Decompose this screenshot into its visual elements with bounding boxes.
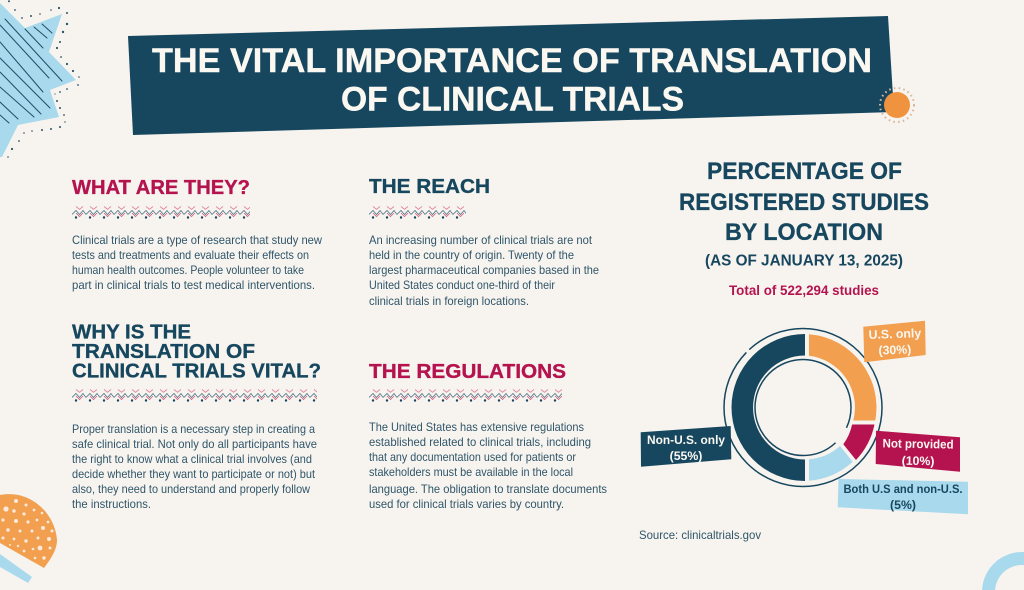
text block: why is translation vital: also, they need to understand and properly follow	[72, 483, 311, 496]
label: not provided: Not provided	[882, 436, 954, 452]
outer ring	[724, 328, 882, 486]
text block: what are they: human health outcomes. People volunteer to take	[72, 264, 304, 277]
text block: the regulations: established related to clinical trials, including	[369, 436, 591, 449]
total studies: Total of 522,294 studies	[729, 283, 879, 298]
title banner: THE VITAL IMPORTANCE OF TRANSLATION	[152, 42, 872, 80]
inner ring	[755, 360, 851, 456]
text block: the reach	[369, 234, 599, 308]
heading: percentage of registered studies	[679, 158, 929, 270]
text block: why is translation vital: decide whether they want to participate or not) but	[72, 468, 316, 481]
icon: orange circle on banner corner	[880, 88, 914, 122]
text block: the regulations: that any documentation used for patients or	[369, 451, 576, 464]
segment: both 5%	[809, 446, 853, 481]
panel: why is translation vital	[72, 320, 321, 511]
text block: the regulations: language. The obligation to translate documents	[369, 483, 607, 496]
heading: percentage of registered studies: REGISTERED STUDIES	[679, 189, 929, 216]
donut chart	[724, 328, 882, 486]
label: non-U.S. only	[641, 426, 731, 467]
text block: the reach: United States conduct one-third of their	[369, 279, 555, 292]
text block: why is translation vital: Proper translation is a necessary step in creating a	[72, 423, 316, 436]
text block: why is translation vital: the right to know what a clinical trial involves (and	[72, 453, 312, 466]
panel: the regulations	[369, 360, 607, 511]
label: U.S. only	[863, 321, 926, 362]
segment: non-U.S. only 55%	[732, 334, 805, 481]
heading: the regulations: THE REGULATIONS	[369, 360, 566, 383]
text block: why is translation vital	[72, 423, 317, 511]
text block: the regulations: The United States has extensive regulations	[369, 421, 584, 434]
icon: orange half circle with blue stick	[0, 494, 57, 583]
heading: why is translation vital	[72, 320, 321, 382]
label: both U.S and non-U.S.: (5%)	[890, 498, 916, 512]
heading: what are they: WHAT ARE THEY?	[72, 176, 250, 199]
segment: not provided 10%	[843, 424, 874, 460]
panel: the reach	[369, 175, 599, 308]
icon: blue star decoration	[0, 0, 80, 158]
label: both U.S and non-U.S.: Both U.S and non-U.S.	[844, 482, 962, 496]
text block: the reach: clinical trials in foreign locations.	[369, 295, 529, 308]
text block: why is translation vital: the instructions.	[72, 498, 151, 511]
text block: what are they	[72, 234, 323, 292]
text block: the reach: largest pharmaceutical companies based in the	[369, 264, 599, 277]
label: both U.S and non-U.S.	[838, 479, 968, 514]
text block: what are they: Clinical trials are a type of research that study new	[72, 234, 323, 247]
title banner	[128, 16, 894, 135]
panel: what are they	[72, 176, 323, 292]
text block: the regulations	[369, 421, 607, 511]
text block: what are they: tests and treatments and evaluate their effects on	[72, 249, 309, 262]
heading: percentage of registered studies: BY LOCATION	[725, 219, 883, 246]
heading: why is translation vital: CLINICAL TRIALS VITAL?	[72, 360, 321, 382]
text block: the reach: held in the country of origin. Twenty of the	[369, 249, 574, 262]
text block: the regulations: used for clinical trials varies by country.	[369, 498, 564, 511]
label: not provided: (10%)	[902, 454, 935, 468]
heading: percentage of registered studies: PERCENTAGE OF	[707, 158, 902, 185]
heading: the reach: THE REACH	[369, 175, 490, 198]
segment: U.S. only 30%	[809, 334, 876, 420]
label: non-U.S. only: Non-U.S. only	[647, 433, 725, 447]
text block: the regulations: stakeholders must be available in the local	[369, 466, 573, 479]
source: Source: clinicaltrials.gov	[639, 528, 761, 542]
text block: what are they: part in clinical trials to test medical interventions.	[72, 279, 315, 292]
heading: why is translation vital: WHY IS THE	[72, 320, 191, 344]
label: U.S. only: U.S. only	[868, 326, 922, 342]
title banner: OF CLINICAL TRIALS	[341, 80, 684, 118]
text block: why is translation vital: safe clinical trial. Not only do all participants have	[72, 438, 317, 451]
icon: blue ring corner	[982, 552, 1024, 590]
label: non-U.S. only: (55%)	[670, 449, 702, 463]
label: not provided	[876, 431, 960, 472]
heading: percentage of registered studies: (AS OF JANUARY 13, 2025)	[705, 252, 903, 270]
label: U.S. only: (30%)	[878, 342, 912, 358]
text block: the reach: An increasing number of clinical trials are not	[369, 234, 593, 247]
heading: why is translation vital: TRANSLATION OF	[72, 340, 255, 363]
